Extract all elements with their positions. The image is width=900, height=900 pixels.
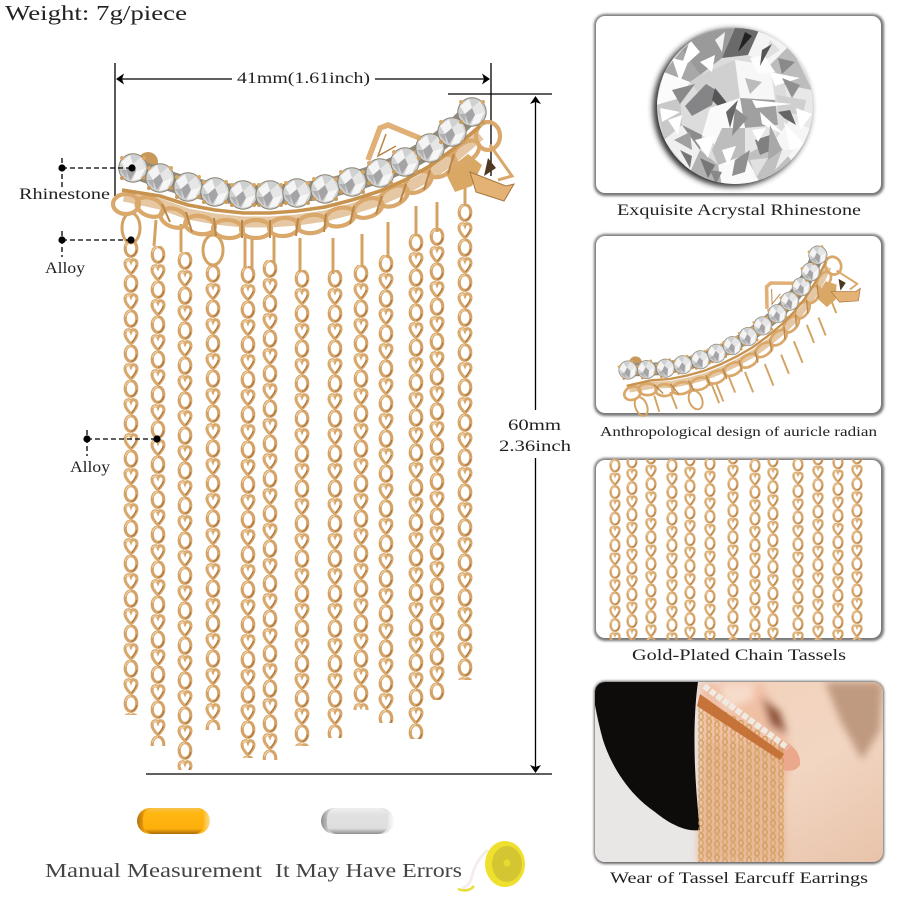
colour swatch: silver: [321, 808, 394, 834]
width dimension: 41mm: [115, 63, 491, 196]
alloy callout: ring: Alloy: [45, 260, 85, 277]
height dimension: 60mm: [146, 94, 571, 774]
caption: auricle design: Anthropological design of auricle radian: [600, 424, 877, 439]
rhinestone callout: [19, 158, 136, 203]
alloy callout: ring: [45, 231, 135, 277]
rhinestone callout: Rhinestone: [19, 186, 110, 203]
earring band, no tassels: [599, 236, 882, 438]
diamond: [653, 26, 815, 187]
chains close-up: [609, 459, 863, 640]
width dimension: 41mm: 41mm(1.61inch): [237, 70, 370, 87]
panel: chain tassels: [594, 451, 884, 657]
caption: rhinestone: Exquisite Acrystal Rhinestone: [617, 202, 861, 219]
height dimension: 60mm: 2.36inch: [499, 438, 571, 455]
caption: earring worn: Wear of Tassel Earcuff Earrings: [610, 870, 868, 887]
weight label: Weight: 7g/piece: [5, 1, 187, 25]
panel: rhinestone close-up: [594, 14, 884, 196]
colour swatch: gold: [137, 808, 210, 834]
icon: yellow tape measure: [458, 841, 525, 890]
caption: chain tassels: Gold-Plated Chain Tassels: [632, 647, 846, 664]
measurement note: It May Have Errors: [275, 860, 462, 882]
panel: worn on ear photo: [592, 679, 886, 866]
panel: auricle design: [594, 234, 884, 438]
earring: chain tassels: [121, 204, 475, 770]
earring: rhinestone band: [113, 98, 514, 274]
height dimension: 60mm: 60mm: [508, 417, 562, 434]
measurement note: Manual Measurement: [45, 860, 263, 882]
alloy callout: chain: Alloy: [70, 459, 110, 476]
alloy callout: chain: [70, 430, 161, 476]
measurement note: [45, 860, 462, 882]
